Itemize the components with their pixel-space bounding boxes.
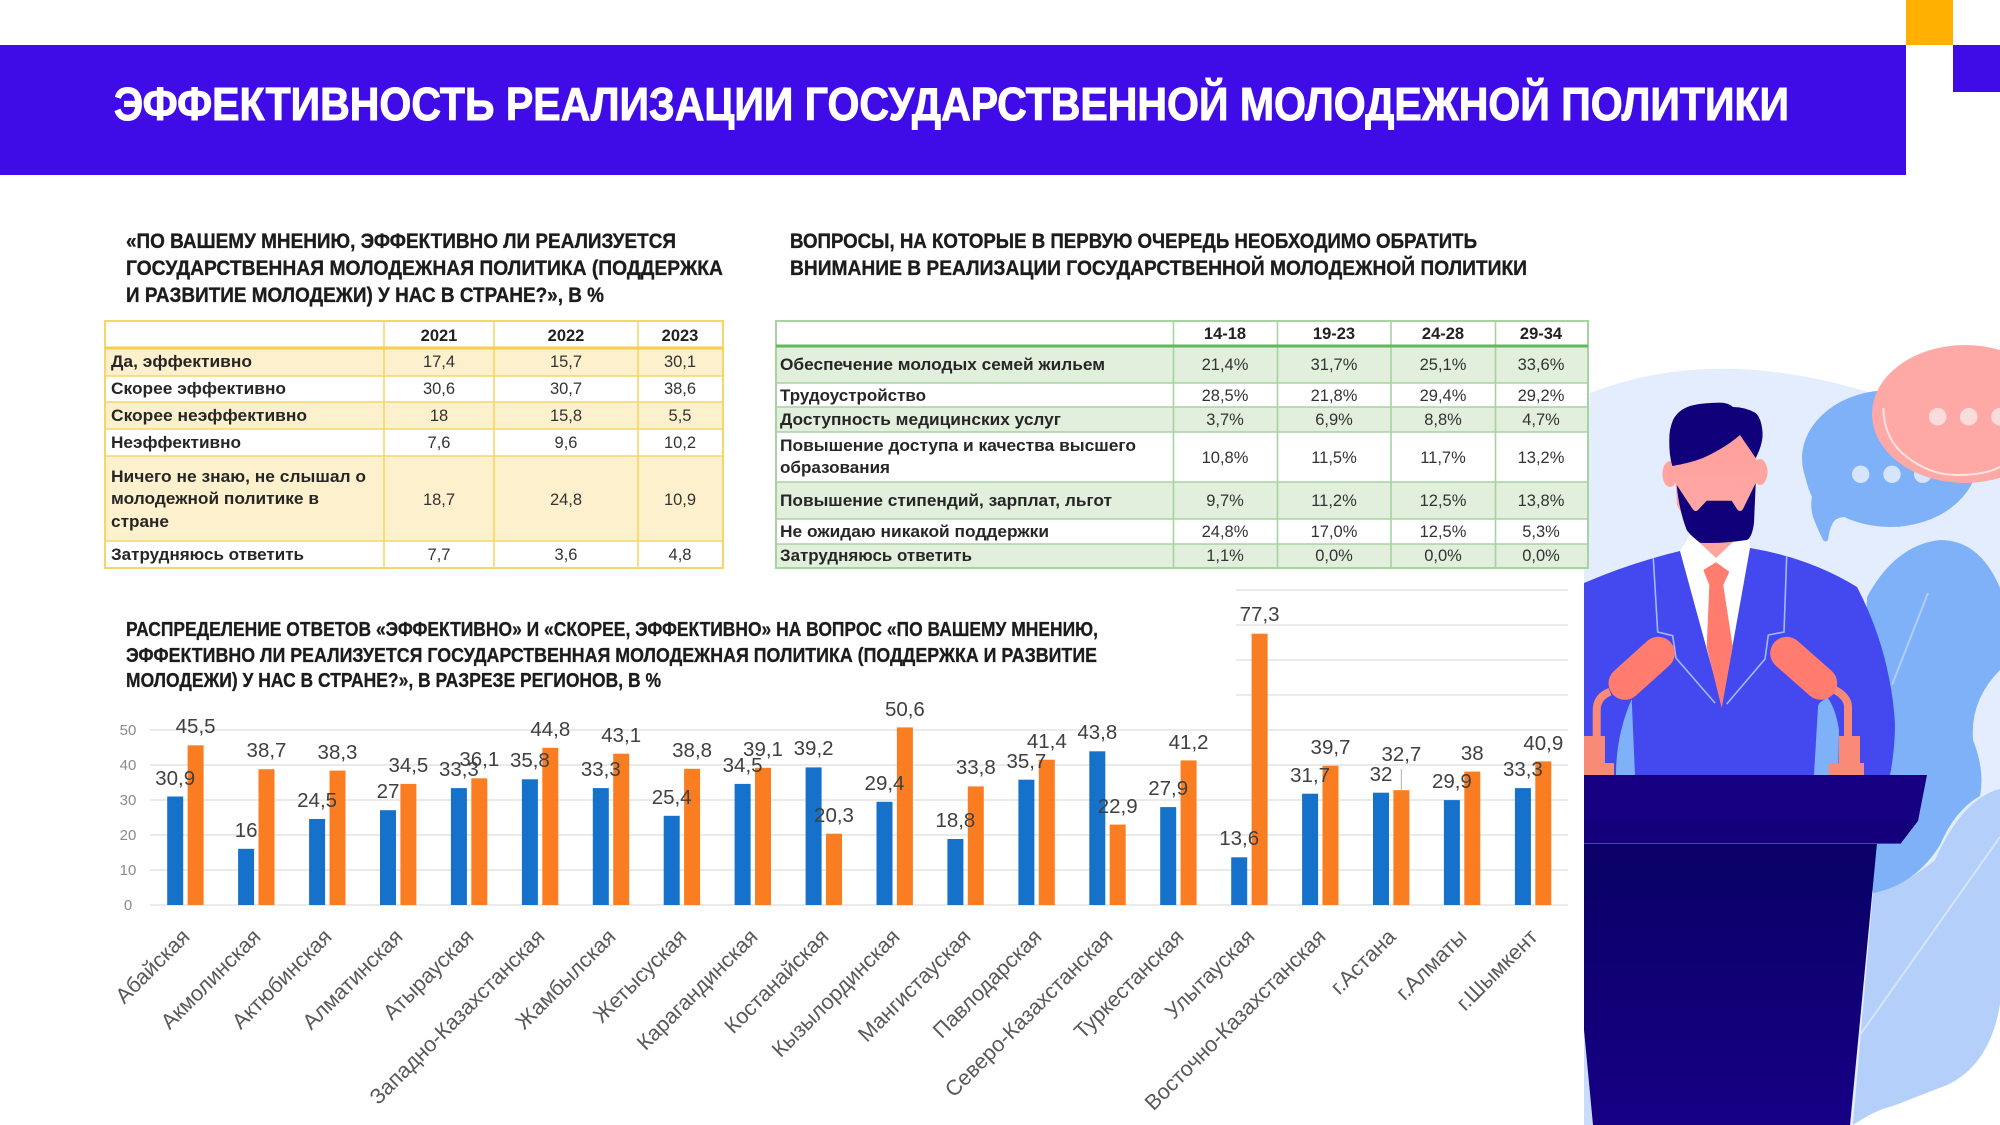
table: answers 2021-2023: Скорее эффективно xyxy=(111,380,286,398)
table: issues by age group: Повышение стипендий, зарплат, льгот xyxy=(780,492,1112,510)
value labels: blue series: 25,4 xyxy=(652,786,692,809)
category labels: Костанайская xyxy=(720,925,834,1038)
value labels: blue series: 24,5 xyxy=(297,789,337,812)
value labels: blue series xyxy=(155,721,1543,850)
lower leaf xyxy=(1853,789,2000,1125)
table: issues by age group: 3,7% xyxy=(1206,411,1244,429)
category labels: Туркестанская xyxy=(1069,925,1189,1044)
category labels: Акмолинская xyxy=(156,925,266,1034)
table: issues by age group: 28,5% xyxy=(1202,387,1249,405)
table: issues by age group: 11,5% xyxy=(1311,449,1357,467)
table: issues by age group: 9,7% xyxy=(1206,492,1244,510)
title: ЭФФЕКТИВНОСТЬ РЕАЛИЗАЦИИ ГОСУДАРСТВЕННОЙ МОЛОДЕЖНОЙ ПОЛИТИКИ xyxy=(114,78,1789,130)
table: answers 2021-2023: 15,7 xyxy=(550,353,582,371)
category labels: Алматинская xyxy=(298,925,408,1034)
heading: effectiveness question: ГОСУДАРСТВЕННАЯ МОЛОДЕЖНАЯ ПОЛИТИКА (ПОДДЕРЖКА xyxy=(126,257,723,280)
header banner xyxy=(0,45,1906,175)
table: issues by age group: 25,1% xyxy=(1420,356,1467,374)
value labels: orange series: 43,1 xyxy=(601,724,641,747)
table: issues by age group: Доступность медицинских услуг xyxy=(780,411,1061,429)
chart grid lines xyxy=(150,590,1568,905)
category labels: Восточно-Казахстанская xyxy=(1140,925,1331,1115)
value labels: orange series: 33,8 xyxy=(956,756,996,779)
value labels: blue series: 16 xyxy=(235,819,258,842)
table: issues by age group: 12,5% xyxy=(1420,523,1467,541)
table: issues by age group: 29,4% xyxy=(1420,387,1467,405)
table: answers 2021-2023: 24,8 xyxy=(550,491,582,509)
table: issues by age group: 19-23 xyxy=(1313,325,1355,343)
table: issues by age group: 10,8% xyxy=(1202,449,1249,467)
table: issues by age group: Не ожидаю никакой поддержки xyxy=(780,523,1049,541)
table: issues by age group: 12,5% xyxy=(1420,492,1467,510)
table: issues by age group: 5,3% xyxy=(1522,523,1560,541)
value labels: orange series: 36,1 xyxy=(459,748,499,771)
value labels: orange series: 44,8 xyxy=(530,718,570,741)
value labels: blue series: 27,9 xyxy=(1148,777,1188,800)
bar chart: regions xyxy=(111,590,1568,1115)
table: issues by age group: 6,9% xyxy=(1315,411,1353,429)
table: answers 2021-2023: 4,8 xyxy=(669,546,691,564)
heading: effectiveness question: «ПО ВАШЕМУ МНЕНИЮ, ЭФФЕКТИВНО ЛИ РЕАЛИЗУЕТСЯ xyxy=(126,230,676,253)
table: answers 2021-2023: 2021 xyxy=(421,327,457,345)
heading: priority issues: ВНИМАНИЕ В РЕАЛИЗАЦИИ ГОСУДАРСТВЕННОЙ МОЛОДЕЖНОЙ ПОЛИТИКИ xyxy=(790,256,1527,280)
podium xyxy=(1584,775,1927,1125)
leader line xyxy=(1400,769,1402,790)
table: issues by age group: Обеспечение молодых семей жильем xyxy=(780,356,1105,374)
table: answers 2021-2023: 5,5 xyxy=(669,407,691,425)
y axis labels: 50 xyxy=(120,722,136,739)
heading: effectiveness question xyxy=(126,230,723,307)
speaker body xyxy=(1584,535,1895,775)
value labels: blue series: 34,5 xyxy=(723,754,763,777)
value labels: blue series: 29,4 xyxy=(865,772,904,795)
table: answers 2021-2023: 7,6 xyxy=(428,434,450,452)
value labels: blue series: 13,6 xyxy=(1219,827,1259,850)
table: answers 2021-2023: Неэффективно xyxy=(111,434,241,452)
category labels: Актюбинская xyxy=(227,925,337,1034)
panel: regional chart xyxy=(111,590,1568,1115)
value labels: orange series: 39,7 xyxy=(1311,736,1350,759)
table: issues by age group: 33,6% xyxy=(1518,356,1565,374)
value labels: orange series: 39,1 xyxy=(743,738,783,761)
speaker head xyxy=(1662,403,1768,543)
value labels: orange series: 38,3 xyxy=(318,741,357,764)
table: answers 2021-2023: 7,7 xyxy=(428,546,450,564)
tie xyxy=(1703,562,1733,708)
category labels: г.Шымкент xyxy=(1452,924,1543,1015)
category labels: Атырауская xyxy=(378,925,479,1025)
category labels: Павлодарская xyxy=(928,925,1047,1043)
y axis labels: 40 xyxy=(120,757,136,774)
table: answers 2021-2023: Затрудняюсь ответить xyxy=(111,546,304,564)
table: answers 2021-2023: 30,6 xyxy=(423,380,455,398)
table: answers 2021-2023: 9,6 xyxy=(555,434,577,452)
heading: regional distribution: ЭФФЕКТИВНО ЛИ РЕАЛИЗУЕТСЯ ГОСУДАРСТВЕННАЯ МОЛОДЕЖНАЯ ПОЛИТИКА (ПОДДЕРЖКА И РАЗВИТИЕ xyxy=(126,645,1097,667)
value labels: blue series: 18,8 xyxy=(935,809,975,832)
table: issues by age group: 13,2% xyxy=(1518,449,1565,467)
category labels: Жетысуская xyxy=(589,925,692,1028)
table: issues by age group: 8,8% xyxy=(1424,411,1462,429)
table: answers 2021-2023: 2023 xyxy=(662,327,698,345)
category labels: г.Астана xyxy=(1326,925,1401,999)
value labels: blue series: 29,9 xyxy=(1432,770,1472,793)
illustration: speaker at podium xyxy=(1584,345,2000,1125)
table: issues by age group: 11,7% xyxy=(1420,449,1466,467)
value labels: orange series: 38,8 xyxy=(672,739,712,762)
table: answers 2021-2023: Да, эффективно xyxy=(111,353,252,371)
table: issues by age group xyxy=(776,321,1588,568)
microphones xyxy=(1584,653,1864,775)
value labels: blue series: 33,3 xyxy=(1503,758,1543,781)
series: rather effective (orange) xyxy=(188,634,1551,905)
y axis labels: 10 xyxy=(120,862,136,879)
table: issues by age group: образования xyxy=(780,459,890,477)
table: answers 2021-2023: 30,1 xyxy=(664,353,696,371)
table: issues by age group: 21,4% xyxy=(1202,356,1249,374)
table: issues by age group: 14-18 xyxy=(1204,325,1246,343)
table: issues by age group: 29-34 xyxy=(1520,325,1563,343)
value labels: blue series: 33,3 xyxy=(581,758,621,781)
table: answers 2021-2023: 10,2 xyxy=(664,434,696,452)
table: issues by age group: 4,7% xyxy=(1522,411,1560,429)
value labels: orange series xyxy=(176,603,1563,827)
value labels: orange series: 34,5 xyxy=(388,754,428,777)
y axis labels: 30 xyxy=(120,792,136,809)
category labels xyxy=(111,924,1543,1115)
value labels: blue series: 43,8 xyxy=(1077,721,1117,744)
table: issues by age group: Повышение доступа и качества высшего xyxy=(780,437,1136,455)
value labels: blue series: 31,7 xyxy=(1290,764,1330,787)
category labels: Улытауская xyxy=(1160,925,1260,1024)
value labels: orange series: 20,3 xyxy=(814,804,854,827)
heading: effectiveness question: И РАЗВИТИЕ МОЛОДЕЖИ) У НАС В СТРАНЕ?», В % xyxy=(126,284,604,307)
category labels: г.Алматы xyxy=(1391,925,1472,1005)
value labels: orange series: 22,9 xyxy=(1098,795,1138,818)
category labels: Северо-Казахстанская xyxy=(940,925,1118,1102)
value labels: orange series: 41,2 xyxy=(1169,731,1209,754)
category labels: Жамбылская xyxy=(511,925,621,1034)
table: issues by age group: Затрудняюсь ответить xyxy=(780,547,972,565)
value labels: blue series: 27 xyxy=(377,780,399,803)
illustration background blob xyxy=(1584,369,2000,1125)
value labels: blue series: 35,7 xyxy=(1006,750,1046,773)
y axis labels: 0 xyxy=(124,897,132,914)
table: answers 2021-2023: стране xyxy=(111,513,169,531)
series: effective (blue) xyxy=(167,751,1531,905)
value labels: orange series: 77,3 xyxy=(1240,603,1280,626)
table: answers 2021-2023 xyxy=(105,321,723,568)
value labels: blue series: 30,9 xyxy=(155,767,195,790)
table: issues by age group: 31,7% xyxy=(1311,356,1358,374)
table: answers 2021-2023: молодежной политике в xyxy=(111,490,319,508)
category labels: Западно-Казахстанская xyxy=(365,925,550,1109)
category labels: Мангистауская xyxy=(853,925,976,1047)
speech bubble: pink xyxy=(1872,345,2000,483)
table: answers 2021-2023: 3,6 xyxy=(555,546,577,564)
value labels: blue series: 35,8 xyxy=(510,749,550,772)
value labels: orange series: 41,4 xyxy=(1027,730,1067,753)
table: issues by age group: 1,1% xyxy=(1206,547,1244,565)
upper leaf xyxy=(1860,540,2000,893)
table: answers 2021-2023: 17,4 xyxy=(423,353,455,371)
table: issues by age group: 21,8% xyxy=(1311,387,1358,405)
table: issues by age group: 0,0% xyxy=(1424,547,1462,565)
category labels: Абайская xyxy=(111,925,195,1008)
value labels: orange series: 38,7 xyxy=(247,739,286,762)
speech bubble: blue xyxy=(1802,390,1978,542)
panel: priority issues by age xyxy=(776,230,1588,568)
table: answers 2021-2023: Скорее неэффективно xyxy=(111,407,307,425)
value labels: blue series: 32 xyxy=(1370,763,1392,786)
value labels: orange series: 45,5 xyxy=(176,715,216,738)
table: issues by age group: 13,8% xyxy=(1518,492,1565,510)
table: issues by age group: 11,2% xyxy=(1311,492,1357,510)
value labels: orange series: 38 xyxy=(1461,742,1484,765)
table: answers 2021-2023: 15,8 xyxy=(550,407,582,425)
heading: regional distribution xyxy=(120,612,1110,697)
heading: regional distribution: МОЛОДЕЖИ) У НАС В СТРАНЕ?», В РАЗРЕЗЕ РЕГИОНОВ, В % xyxy=(126,670,661,692)
heading: regional distribution: РАСПРЕДЕЛЕНИЕ ОТВЕТОВ «ЭФФЕКТИВНО» И «СКОРЕЕ, ЭФФЕКТИВНО» НА ВОПРОС «ПО ВАШЕМУ МНЕНИЮ, xyxy=(126,619,1098,641)
heading: priority issues: ВОПРОСЫ, НА КОТОРЫЕ В ПЕРВУЮ ОЧЕРЕДЬ НЕОБХОДИМО ОБРАТИТЬ xyxy=(790,230,1477,253)
category labels: Карагандинская xyxy=(632,925,763,1055)
value labels: blue series: 39,2 xyxy=(794,737,834,760)
table: answers 2021-2023: 30,7 xyxy=(550,380,582,398)
table: answers 2021-2023: 2022 xyxy=(548,327,584,345)
table: answers 2021-2023: 18 xyxy=(430,407,448,425)
table: answers 2021-2023: 10,9 xyxy=(664,491,696,509)
value labels: blue series: 33,3 xyxy=(439,758,479,781)
table: issues by age group: 24,8% xyxy=(1202,523,1249,541)
table: issues by age group: 29,2% xyxy=(1518,387,1565,405)
corner decoration squares xyxy=(1906,0,2000,92)
table: issues by age group: 17,0% xyxy=(1311,523,1358,541)
y axis labels: 20 xyxy=(120,827,136,844)
table: issues by age group: 24-28 xyxy=(1422,325,1464,343)
category labels: Кызылординская xyxy=(767,925,905,1062)
value labels: orange series: 32,7 xyxy=(1381,743,1421,766)
table: issues by age group: Трудоустройство xyxy=(780,387,926,405)
table: issues by age group: 0,0% xyxy=(1315,547,1353,565)
heading: priority issues xyxy=(790,230,1527,280)
value labels: orange series: 50,6 xyxy=(885,698,925,721)
table: answers 2021-2023: 18,7 xyxy=(423,491,455,509)
y axis labels xyxy=(120,722,136,914)
value labels: orange series: 40,9 xyxy=(1523,732,1563,755)
table: answers 2021-2023: Ничего не знаю, не слышал о xyxy=(111,468,366,486)
table: answers 2021-2023: 38,6 xyxy=(664,380,696,398)
panel: effectiveness by year xyxy=(105,230,723,568)
table: issues by age group: 0,0% xyxy=(1522,547,1560,565)
